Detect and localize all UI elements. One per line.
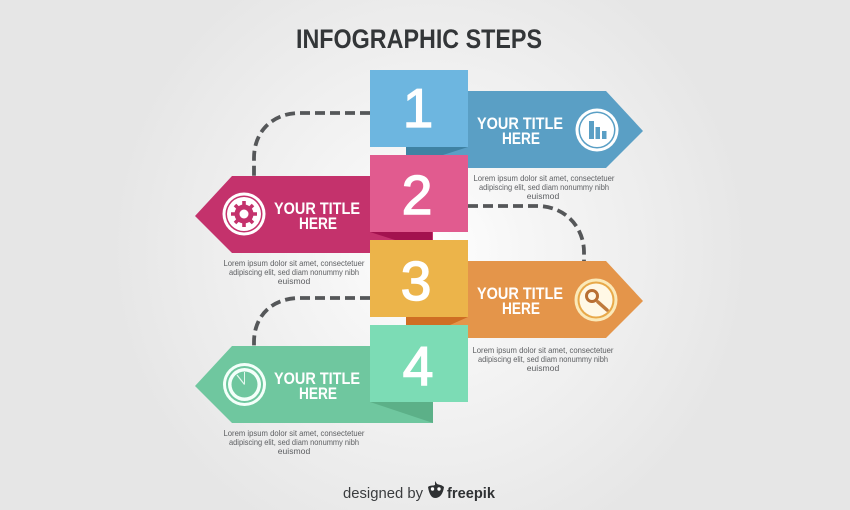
step 1 fold <box>406 147 468 155</box>
step 3 description: adipiscing elit, sed diam nonummy nibh <box>478 354 608 364</box>
step 3 description: euismod <box>527 363 559 373</box>
icon: clock <box>223 363 266 406</box>
icon: gear <box>222 192 266 236</box>
step 1 description: adipiscing elit, sed diam nonummy nibh <box>479 182 609 192</box>
step 1 arrow title: YOUR TITLE <box>477 114 563 133</box>
step 3 arrow <box>406 261 643 338</box>
step 2 description: Lorem ipsum dolor sit amet, consectetuer <box>224 258 365 268</box>
step 2 arrow title: YOUR TITLE <box>274 199 360 218</box>
step 1 arrow <box>406 91 643 168</box>
step 4 arrow: HERE <box>299 384 337 403</box>
step 2 fold <box>370 232 432 240</box>
step 2 description: euismod <box>278 276 310 286</box>
icon: bar chart <box>576 108 618 152</box>
step 3 arrow title: YOUR TITLE <box>477 284 563 303</box>
number box 3: 3 <box>401 250 431 312</box>
step 4 description: adipiscing elit, sed diam nonummy nibh <box>229 437 359 447</box>
step 3 arrow: HERE <box>502 299 540 318</box>
step 1 description: Lorem ipsum dolor sit amet, consectetuer <box>474 173 615 183</box>
number box 4 <box>370 325 468 402</box>
step 3 description: Lorem ipsum dolor sit amet, consectetuer <box>472 345 614 355</box>
icon: magnifier <box>574 278 618 322</box>
number box 2 <box>370 155 468 232</box>
step 4 description: euismod <box>278 446 310 456</box>
icon: freepik mascot <box>428 481 444 498</box>
step 4 arrow <box>195 346 433 423</box>
step 1 arrow: HERE <box>502 129 540 148</box>
number box 1: 1 <box>403 77 433 139</box>
number box 3 <box>370 240 468 317</box>
credit: designed by freepik: designed by <box>343 485 423 502</box>
title: INFOGRAPHIC STEPS <box>296 24 542 54</box>
credit: designed by freepik <box>343 481 496 502</box>
dashed connector 1 to 2 <box>254 113 370 176</box>
number box 4: 4 <box>403 335 433 397</box>
step 4 arrow title: YOUR TITLE <box>274 369 360 388</box>
step 2 arrow: HERE <box>299 214 337 233</box>
step 1 description: euismod <box>527 191 559 201</box>
step 2 arrow <box>195 176 433 253</box>
step 4 fold <box>370 402 433 423</box>
number box 1 <box>370 70 468 147</box>
step 3 fold <box>406 317 468 325</box>
dashed connector 3 to 4 <box>254 298 370 346</box>
credit: designed by freepik: freepik <box>447 485 496 502</box>
number box 2: 2 <box>402 164 432 226</box>
step 2 description: adipiscing elit, sed diam nonummy nibh <box>229 267 359 277</box>
step 4 description: Lorem ipsum dolor sit amet, consectetuer <box>224 428 365 438</box>
dashed connector 2 to 3 <box>468 206 584 261</box>
